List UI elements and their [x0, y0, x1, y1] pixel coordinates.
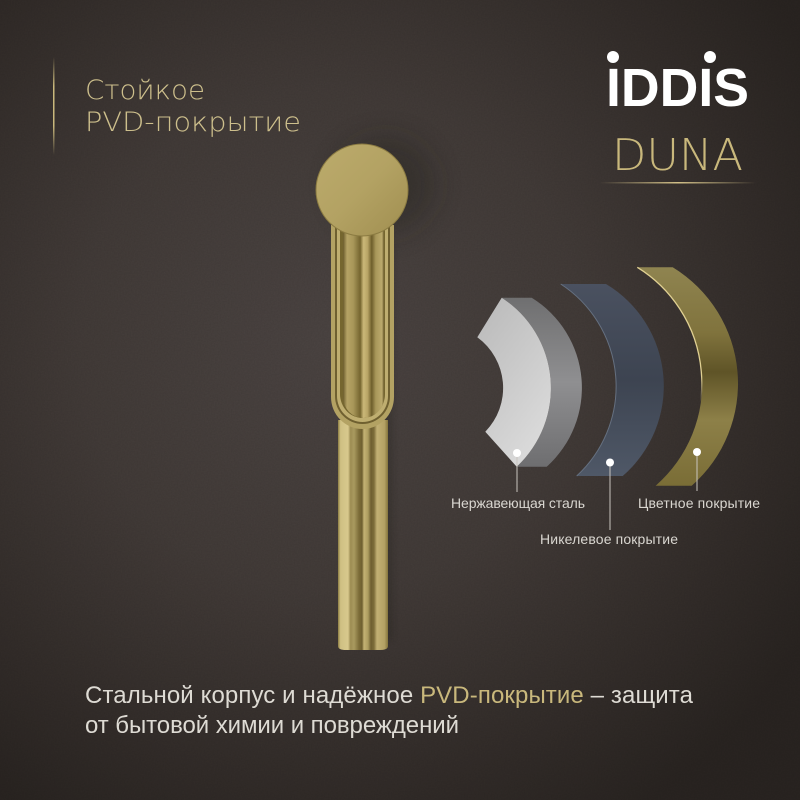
logo: IDDIS DUNA [600, 51, 756, 184]
disc [316, 144, 408, 236]
label: colored coating: Цветное покрытие [638, 495, 760, 511]
caption [85, 682, 694, 739]
collection name: DUNA [612, 130, 743, 181]
caption: от бытовой химии и повреждений [85, 712, 459, 739]
brand name: IDDIS [606, 58, 749, 118]
product: faucet handle [316, 137, 435, 650]
label: nickel coating [540, 458, 678, 547]
label: colored coating [638, 448, 760, 511]
caption: Стальной корпус и надёжное PVD-покрытие – защита [85, 682, 694, 709]
heading: PVD coating: Стойкое [85, 75, 205, 106]
label: stainless steel: Нержавеющая сталь [451, 495, 585, 511]
layer: colored coating [637, 267, 738, 486]
loop [331, 225, 394, 429]
lower tube [338, 420, 388, 650]
layer: stainless steel [477, 298, 582, 467]
heading: PVD coating: PVD-покрытие [85, 107, 301, 138]
heading: PVD coating [53, 57, 301, 155]
layer: nickel coating [561, 284, 664, 476]
label: stainless steel [451, 449, 585, 511]
label: nickel coating: Никелевое покрытие [540, 531, 678, 547]
